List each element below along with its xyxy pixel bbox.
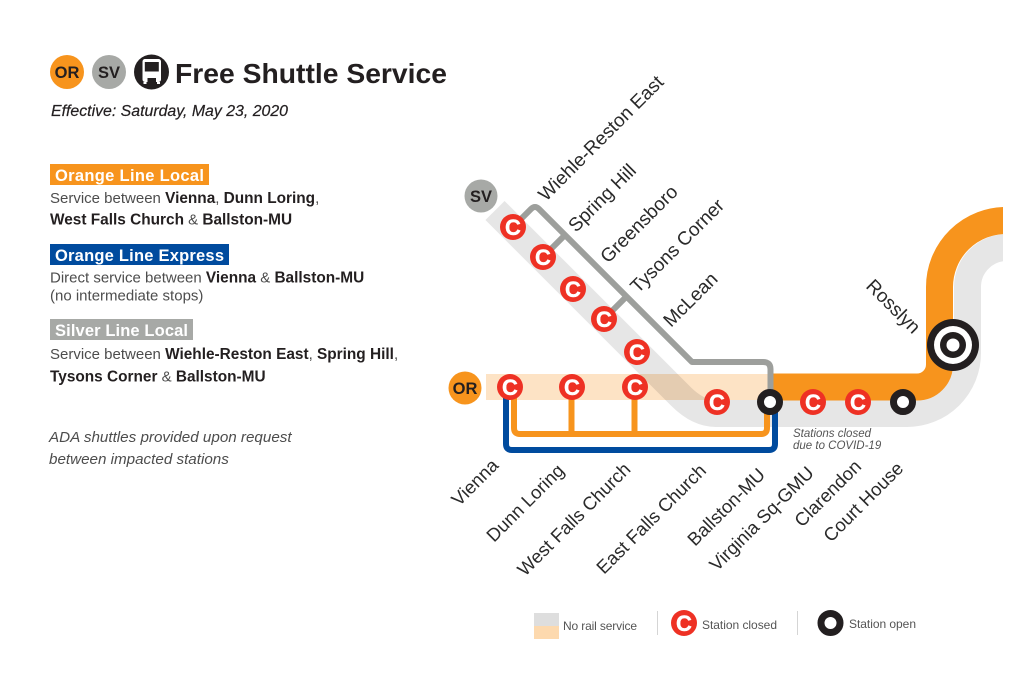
station labels: upper: Tysons Corner	[627, 195, 729, 298]
station labels: upper: Wiehle-Reston East	[535, 71, 669, 206]
silver line shuttle route	[513, 207, 770, 400]
closed stations: C	[596, 307, 612, 332]
station labels: lower: West Falls Church	[513, 458, 634, 580]
closed stations: C	[629, 340, 645, 365]
station labels: lower: Court House	[819, 458, 907, 546]
station labels: lower: Virginia Sq-GMU	[705, 462, 818, 575]
icon: bus	[134, 54, 169, 90]
closed stations: C	[565, 277, 581, 302]
silver line local	[50, 319, 398, 386]
legend: station closed: C	[676, 611, 692, 636]
silver line local: Silver Line Local	[55, 322, 188, 340]
closed stations: C	[535, 245, 551, 270]
orange line express: (no intermediate stops)	[50, 288, 203, 304]
orange line express: Orange Line Express	[55, 247, 224, 265]
line badge: SV: SV	[470, 188, 492, 206]
station label: Rosslyn: Rosslyn	[861, 276, 924, 338]
panel: service descriptions	[48, 164, 398, 468]
legend: station open: Station open	[849, 617, 916, 631]
station labels: lower: Dunn Loring	[482, 460, 568, 546]
line badge: SV	[464, 180, 498, 212]
station labels: upper	[535, 71, 729, 332]
express shuttle route	[506, 395, 775, 450]
station labels: upper: Greensboro	[597, 182, 682, 268]
ADA note	[48, 429, 292, 468]
orange line local: Orange Line Local	[55, 167, 204, 185]
orange line express: Direct service between Vienna & Ballston-MU	[50, 270, 364, 286]
legend: no rail service	[534, 613, 637, 639]
title block	[50, 54, 447, 120]
station labels: lower: East Falls Church	[592, 460, 710, 578]
line badge: OR: OR	[453, 380, 477, 398]
station labels: lower: Clarendon	[790, 456, 865, 531]
station labels: upper: McLean	[660, 269, 722, 332]
orange line express	[50, 244, 364, 304]
closed stations: C	[805, 390, 821, 415]
orange line local: West Falls Church & Ballston-MU	[50, 212, 292, 228]
icon: SV badge: SV	[98, 64, 120, 82]
closed stations: C	[564, 375, 580, 400]
station labels: lower	[447, 454, 907, 580]
closed stations: C	[505, 215, 521, 240]
silver line local: Service between Wiehle-Reston East, Spring Hill,	[50, 346, 398, 363]
line badge: OR	[448, 372, 482, 404]
closed stations	[497, 214, 871, 415]
Rosslyn transfer station	[927, 319, 979, 371]
closed stations: C	[627, 375, 643, 400]
icon: OR badge	[50, 55, 84, 89]
covid note: due to COVID-19	[793, 440, 882, 452]
legend: station closed	[671, 610, 777, 636]
station labels: upper: Spring Hill	[565, 160, 641, 237]
station labels: lower: Vienna	[447, 454, 503, 510]
closed stations: C	[709, 390, 725, 415]
local orange shuttle route	[514, 395, 767, 434]
silver line local: Tysons Corner & Ballston-MU	[50, 368, 266, 386]
covid note	[793, 428, 882, 452]
orange line local	[50, 164, 319, 228]
effective date: Effective: Saturday, May 23, 2020	[51, 103, 288, 120]
closed stations: C	[850, 390, 866, 415]
legend: station open	[821, 614, 916, 632]
legend: no rail service: No rail service	[563, 619, 637, 633]
open stations	[760, 392, 912, 412]
no rail service bands	[486, 210, 1007, 414]
orange line local: Service between Vienna, Dunn Loring,	[50, 190, 319, 207]
route map	[447, 71, 1007, 580]
ADA note: ADA shuttles provided upon request	[48, 429, 292, 446]
legend: station closed: Station closed	[702, 618, 777, 632]
icon: SV badge	[92, 55, 126, 89]
heading: Free Shuttle Service	[175, 58, 447, 89]
ADA note: between impacted stations	[49, 451, 229, 468]
icon: OR badge: OR	[55, 64, 79, 82]
station labels: lower: Ballston-MU	[683, 464, 769, 550]
orange line open segment	[770, 220, 1007, 387]
legend	[534, 610, 916, 639]
closed stations: C	[502, 375, 518, 400]
covid note: Stations closed	[793, 428, 872, 440]
